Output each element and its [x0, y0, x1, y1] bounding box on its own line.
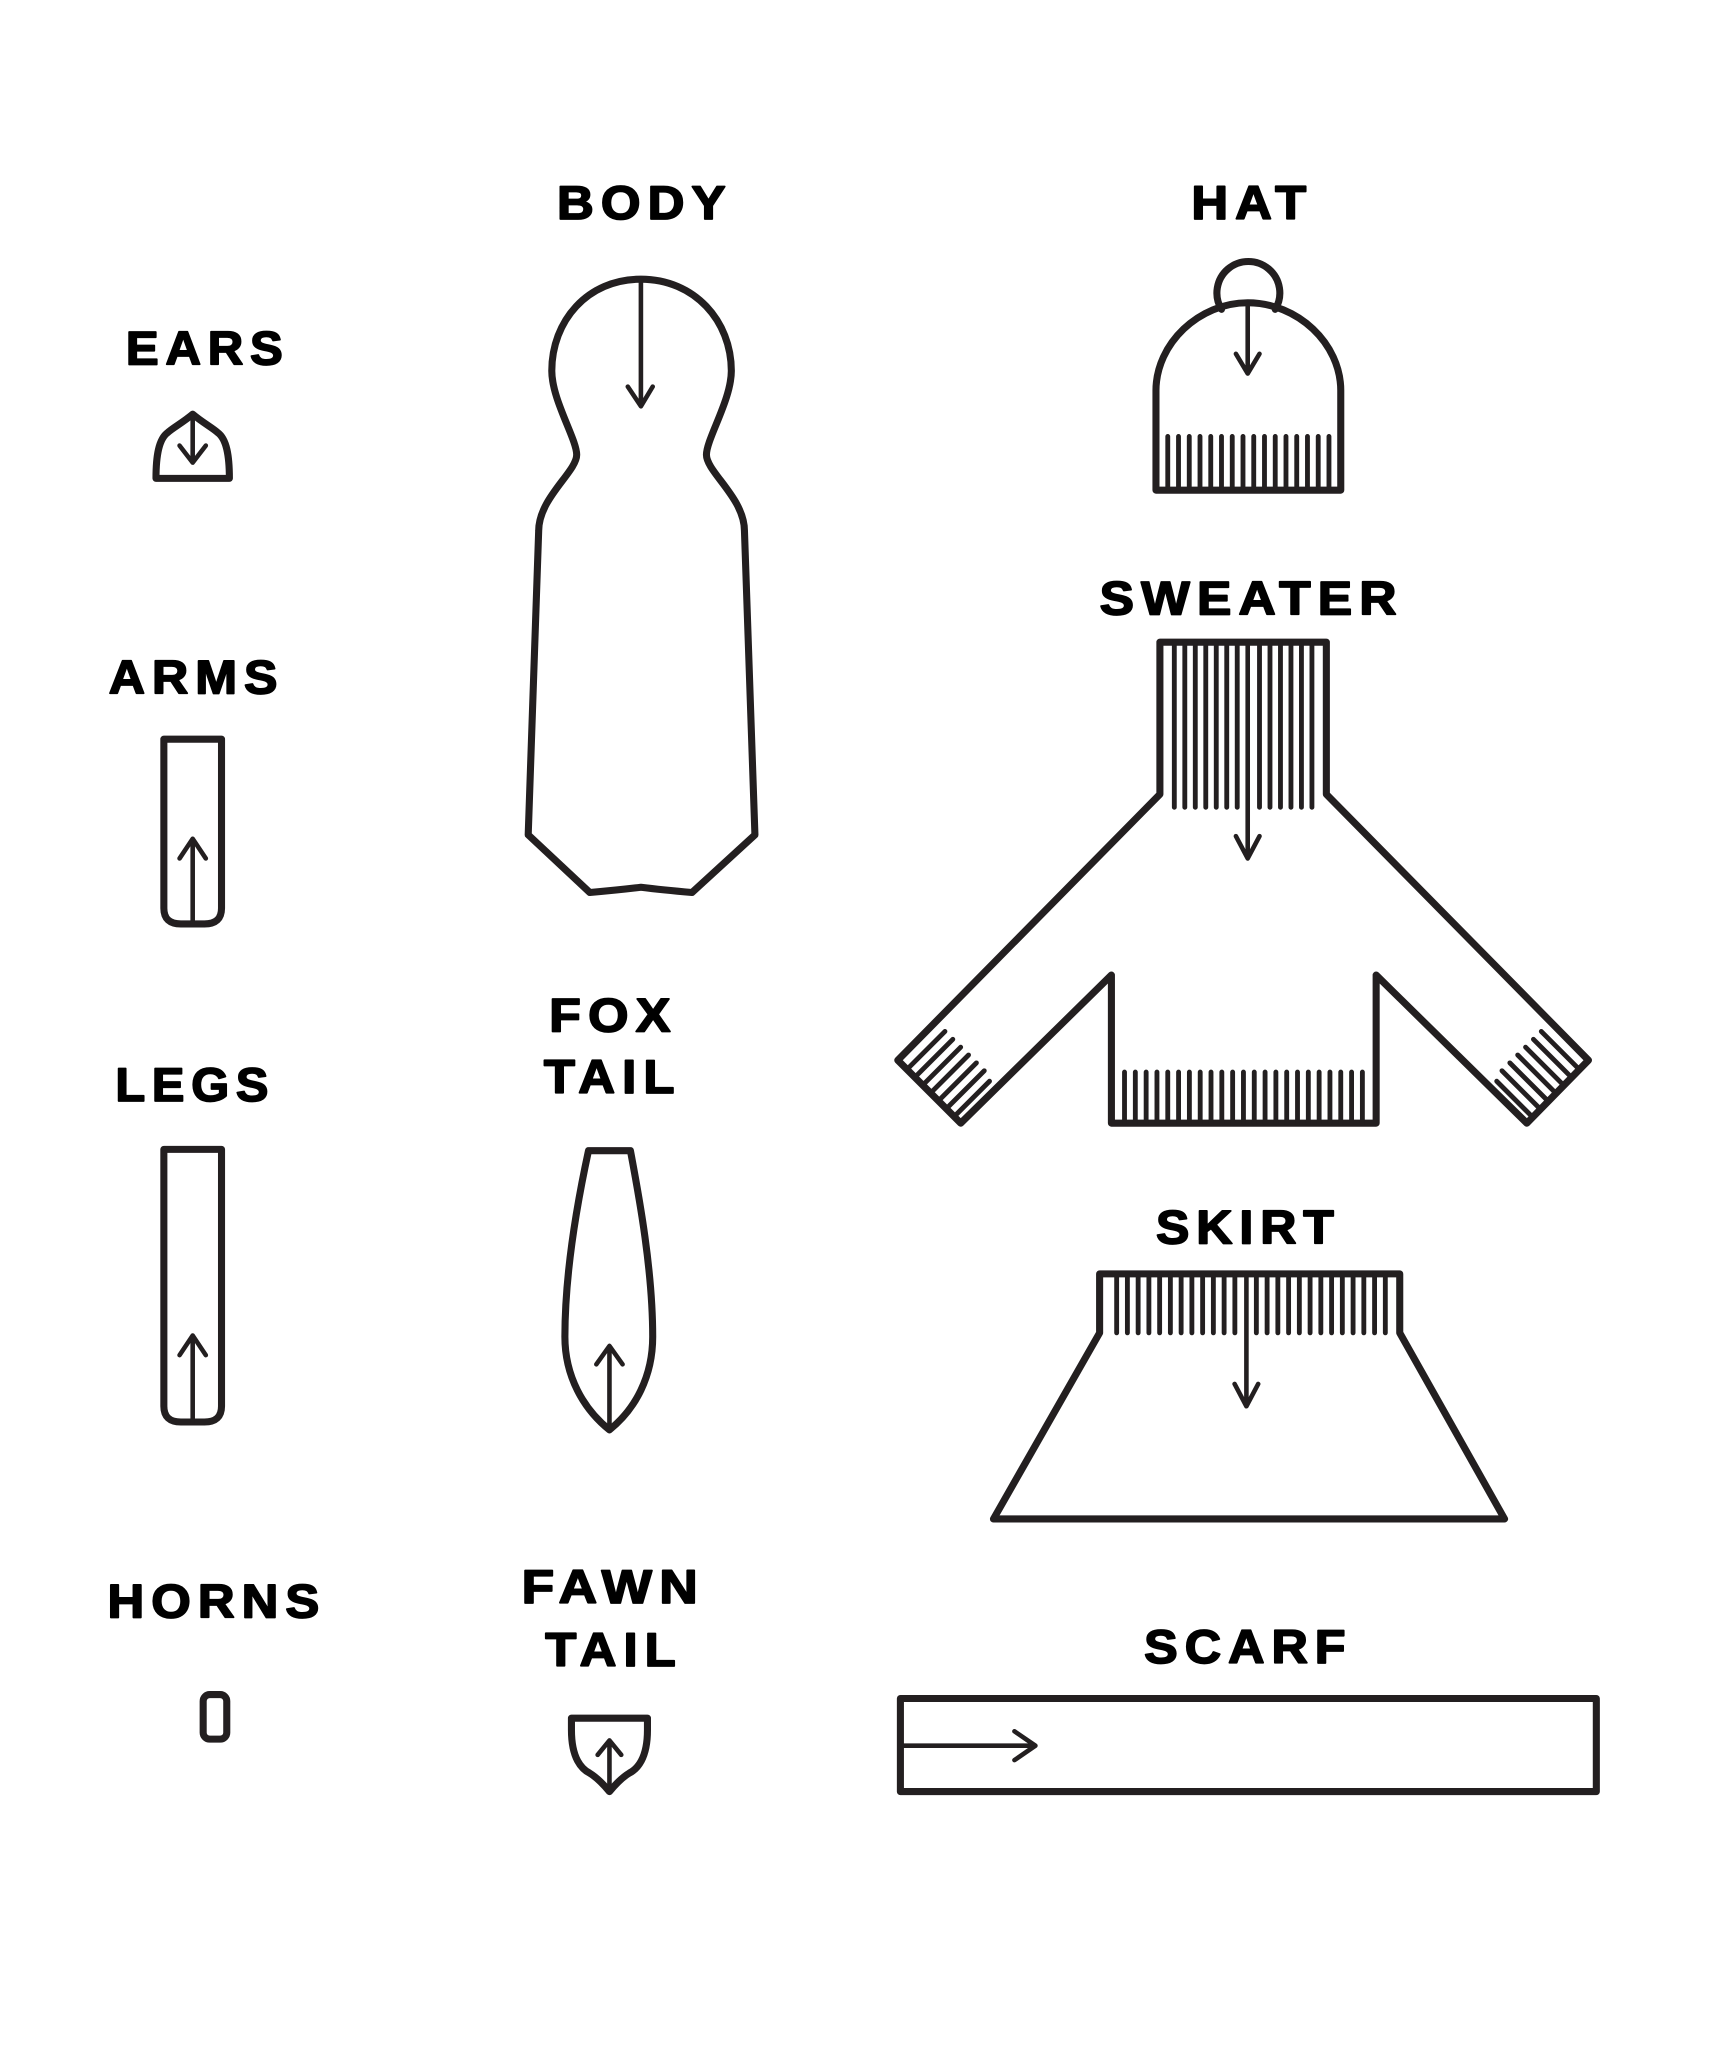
piece: horns — [203, 1695, 227, 1739]
label: fawn tail: FAWN — [522, 1560, 705, 1613]
label: arms: ARMS — [109, 650, 284, 703]
arrow: legs grain — [180, 1335, 206, 1422]
arrow: arms grain — [180, 839, 206, 924]
left cuff ribbing — [907, 1031, 990, 1117]
label: sweater: SWEATER — [1100, 572, 1404, 625]
label: scarf: SCARF — [1144, 1620, 1353, 1673]
arrow: scarf grain — [903, 1731, 1035, 1760]
hat outline — [1156, 303, 1341, 490]
waistband ribbing — [1117, 1274, 1385, 1333]
right cuff ribbing — [1497, 1031, 1579, 1117]
neck ribbing — [1174, 642, 1312, 807]
label: skirt: SKIRT — [1156, 1201, 1341, 1254]
piece: arms — [164, 739, 222, 924]
label: fawn tail: TAIL — [545, 1623, 683, 1676]
arrow: hat grain — [1236, 304, 1260, 374]
piece: ears — [156, 414, 229, 478]
piece: skirt — [993, 1274, 1505, 1519]
label: legs: LEGS — [115, 1058, 275, 1111]
label: fox tail — [544, 988, 682, 1103]
pompom — [1217, 261, 1280, 309]
piece: fox tail — [565, 1151, 653, 1430]
arrow: body grain — [628, 279, 653, 406]
label: horns: HORNS — [107, 1574, 326, 1627]
label: fox tail: TAIL — [544, 1050, 682, 1103]
arrow: ears grain — [180, 414, 206, 463]
piece: legs — [164, 1149, 222, 1422]
hat ribbing — [1168, 436, 1329, 490]
hem ribbing — [1125, 1072, 1362, 1123]
piece: sweater — [898, 642, 1588, 1123]
label: hat: HAT — [1191, 176, 1313, 229]
arrow: sweater grain — [1236, 642, 1260, 858]
arrow: skirt grain — [1235, 1274, 1258, 1406]
piece: fawn tail — [571, 1718, 647, 1792]
piece: scarf — [900, 1699, 1596, 1792]
label: fox tail: FOX — [549, 988, 678, 1041]
piece: body — [528, 279, 755, 893]
label: fawn tail — [522, 1560, 705, 1676]
label: body: BODY — [557, 176, 733, 229]
piece: hat — [1156, 261, 1341, 490]
label: ears: EARS — [126, 321, 290, 374]
arrow: fawn tail grain — [598, 1740, 621, 1792]
arrow: fox tail grain — [596, 1346, 623, 1430]
